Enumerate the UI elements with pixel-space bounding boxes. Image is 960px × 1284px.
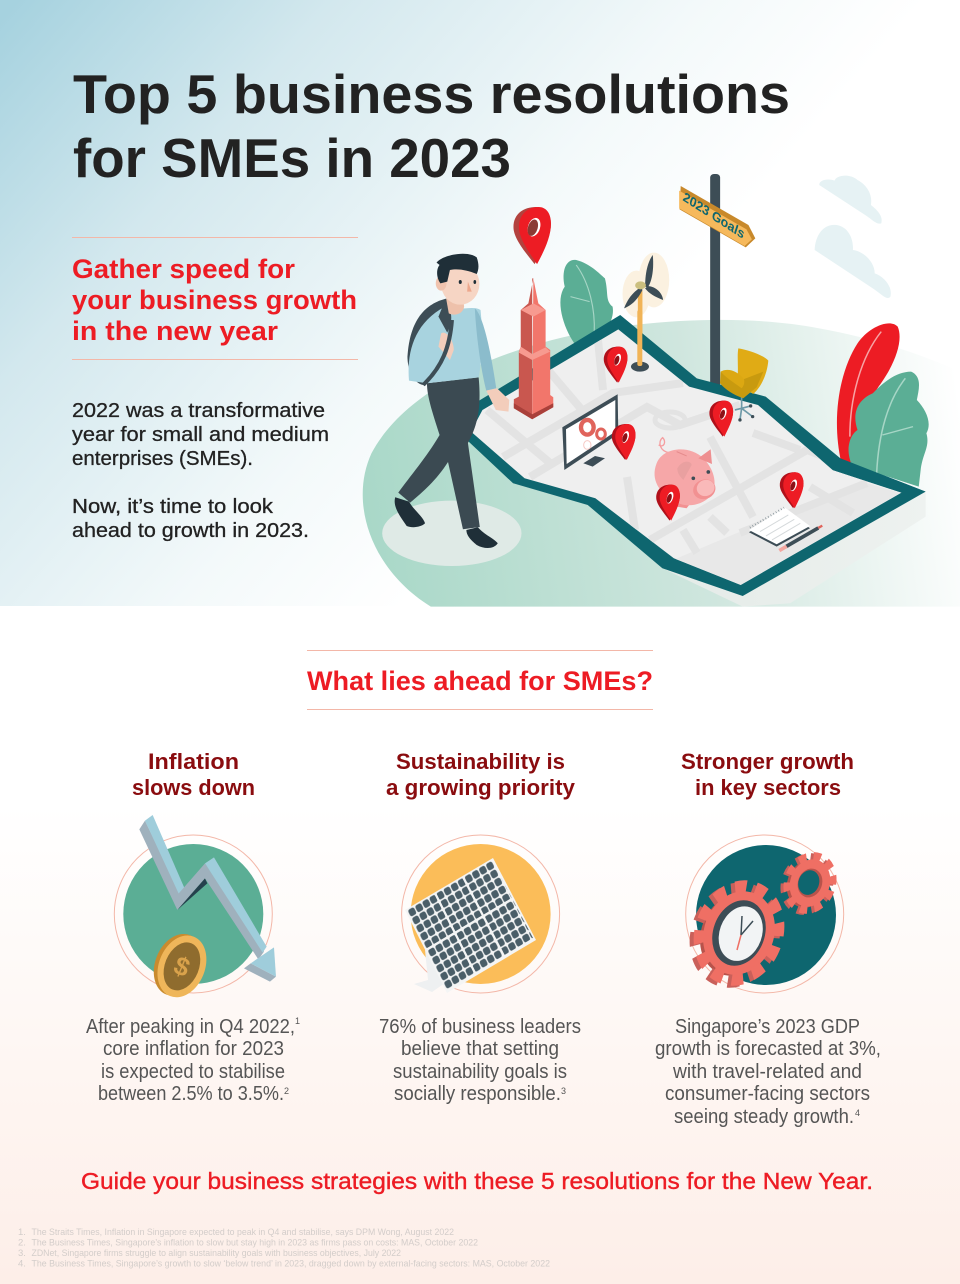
small gear bbox=[777, 850, 840, 917]
panel: sustainability bbox=[379, 749, 581, 1105]
title: for SMEs in 2023 bbox=[73, 127, 511, 189]
sign text: 2023 Goals bbox=[681, 189, 747, 242]
text: 2 bbox=[284, 1086, 289, 1096]
text: 3 bbox=[561, 1086, 566, 1096]
signpost bbox=[679, 174, 755, 391]
text: is expected to stabilise bbox=[101, 1061, 285, 1083]
hero background bbox=[0, 0, 960, 606]
text: with travel-related and bbox=[672, 1061, 862, 1083]
intro text: 2022 was a transformative bbox=[72, 400, 325, 422]
shadow under man bbox=[382, 501, 521, 566]
text bbox=[655, 1016, 881, 1128]
title bbox=[73, 63, 790, 189]
text: 4 bbox=[855, 1108, 860, 1118]
heading: in key sectors bbox=[695, 775, 841, 800]
text: core inflation for 2023 bbox=[103, 1038, 284, 1060]
subheading: your business growth bbox=[72, 285, 357, 315]
backpack bbox=[407, 298, 454, 385]
text: between 2.5% to 3.5%. bbox=[98, 1083, 284, 1105]
tower bbox=[514, 278, 553, 419]
arm holding strap bbox=[438, 333, 454, 360]
leaf: green back bbox=[560, 260, 613, 343]
subheading: Gather speed for bbox=[72, 254, 295, 284]
shoes bbox=[395, 497, 425, 527]
shirt bbox=[409, 307, 482, 383]
heading bbox=[132, 749, 255, 800]
illustration: walking man on map bbox=[363, 174, 960, 607]
trousers bbox=[398, 377, 480, 529]
turbine base bbox=[631, 310, 649, 372]
map roads bbox=[487, 340, 900, 585]
text: seeing steady growth. bbox=[674, 1106, 854, 1128]
heading: Inflation bbox=[148, 749, 239, 774]
footnotes: 3. bbox=[18, 1248, 26, 1259]
heading: slows down bbox=[132, 775, 255, 800]
map shadow bbox=[469, 440, 926, 607]
icon: notebook and pencil bbox=[749, 508, 822, 551]
call to action: Guide your business strategies with these 5 resolutions for the New Year. bbox=[81, 1168, 873, 1194]
footnotes bbox=[18, 1227, 550, 1270]
text: 1 bbox=[295, 1016, 300, 1026]
leaves: red and green bbox=[837, 323, 929, 487]
hand bbox=[486, 388, 509, 412]
text: Singapore’s 2023 GDP bbox=[675, 1016, 860, 1038]
footnotes: The Business Times, Singapore’s inflation to slow but stay high in 2023 as firms pass on costs: MAS, October 2022 bbox=[32, 1238, 478, 1248]
subheading: in the new year bbox=[72, 316, 279, 346]
icon: monitor with gears bbox=[562, 394, 618, 470]
section heading: What lies ahead for SMEs? bbox=[307, 666, 653, 696]
text bbox=[379, 1016, 581, 1105]
background: lower section bbox=[0, 600, 960, 1284]
big gear bbox=[683, 876, 791, 992]
text bbox=[86, 1016, 300, 1105]
footnotes: 4. bbox=[18, 1258, 26, 1270]
heading: Sustainability is bbox=[396, 749, 565, 774]
map border front over leaves bbox=[833, 458, 926, 493]
map bbox=[463, 315, 926, 596]
subheading bbox=[72, 237, 358, 360]
heading bbox=[681, 749, 854, 800]
text: socially responsible. bbox=[394, 1083, 561, 1105]
intro text: Now, it’s time to look bbox=[72, 496, 274, 518]
text: consumer-facing sectors bbox=[665, 1083, 870, 1105]
head bbox=[446, 298, 464, 315]
intro text: ahead to growth in 2023. bbox=[72, 520, 309, 542]
panel: growth bbox=[655, 749, 881, 1128]
footnotes: ZDNet, Singapore firms struggle to align sustainability goals with business objectives, July 2022 bbox=[32, 1248, 401, 1259]
text: growth is forecasted at 3%, bbox=[655, 1038, 881, 1060]
text: 76% of business leaders bbox=[379, 1016, 581, 1038]
text: sustainability goals is bbox=[393, 1061, 567, 1083]
coin bbox=[145, 927, 215, 1005]
icon: solar panel bbox=[402, 835, 560, 993]
heading: a growing priority bbox=[386, 775, 576, 800]
intro text bbox=[72, 400, 329, 542]
footnotes: The Straits Times, Inflation in Singapore expected to peak in Q4 and stabilise, says DPM Wong, August 2022 bbox=[32, 1227, 454, 1238]
icon: falling arrow and coin bbox=[114, 815, 276, 1005]
text: After peaking in Q4 2022, bbox=[86, 1016, 295, 1038]
panel: hero bbox=[0, 0, 960, 607]
details on the map bbox=[562, 310, 822, 551]
intro text: enterprises (SMEs). bbox=[72, 448, 253, 470]
text: believe that setting bbox=[401, 1038, 559, 1060]
icon: clouds bbox=[815, 176, 891, 298]
heading: Stronger growth bbox=[681, 749, 854, 774]
man walking bbox=[395, 254, 509, 548]
footnotes: 2. bbox=[18, 1238, 26, 1248]
panel: inflation bbox=[86, 749, 300, 1105]
icon: office chair bbox=[720, 348, 768, 422]
intro text: year for small and medium bbox=[72, 424, 329, 446]
footnotes: 1. bbox=[18, 1227, 26, 1238]
icon: piggy bank bbox=[655, 438, 718, 508]
footnotes: The Business Times, Singapore’s growth to slow ‘below trend’ in 2023, dragged down by external-facing sectors: MAS, October 2022 bbox=[32, 1258, 550, 1270]
icon: map pins bbox=[513, 207, 804, 521]
icon: gears and clock bbox=[683, 835, 844, 993]
green ground blob bbox=[363, 320, 960, 607]
icon: wind turbine bbox=[623, 253, 669, 365]
heading bbox=[386, 749, 576, 800]
title: Top 5 business resolutions bbox=[73, 63, 790, 125]
coin: $ bbox=[170, 950, 195, 983]
